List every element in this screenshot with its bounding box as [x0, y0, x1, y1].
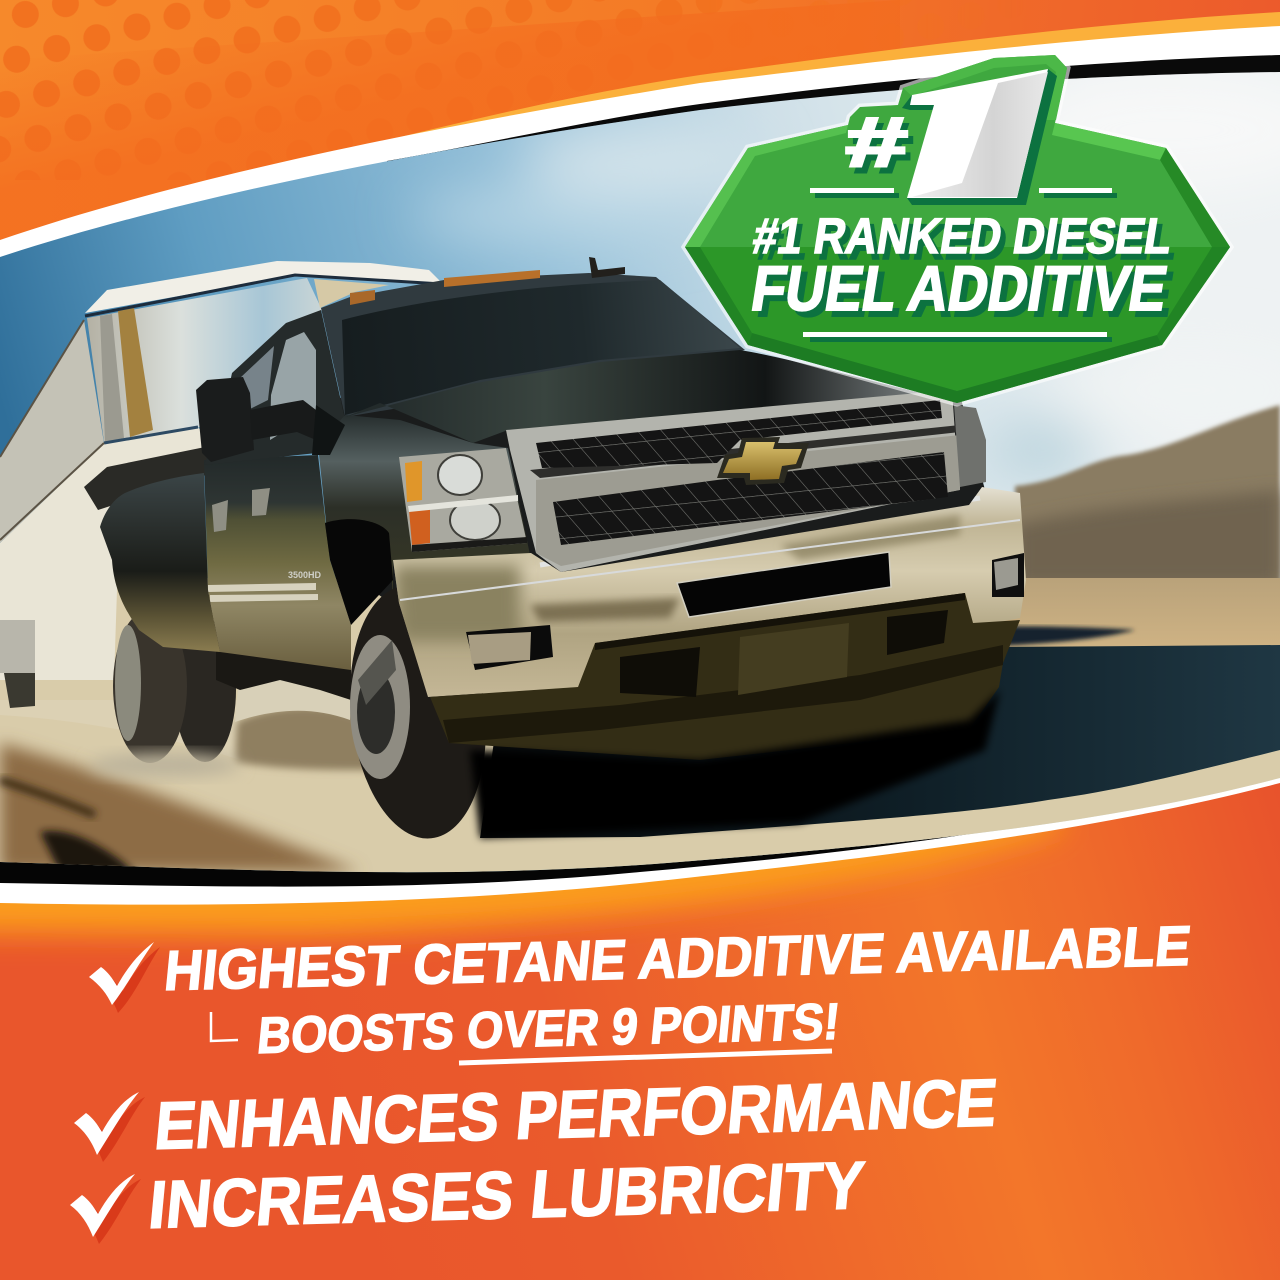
left fog light	[466, 625, 553, 670]
badge shape	[685, 55, 1230, 403]
grille surround	[506, 390, 960, 572]
hash sign: #	[849, 109, 911, 187]
badge text: line 2: FUEL ADDITIVE	[747, 254, 1172, 324]
chrome bumper	[393, 487, 1026, 697]
yellow accent line	[396, 12, 1280, 150]
benefit 3 check icon	[70, 1174, 141, 1244]
right fog light	[992, 553, 1024, 597]
divider lines	[810, 188, 1117, 198]
bottom rule	[803, 332, 1112, 342]
roof	[321, 273, 745, 417]
benefit 1 check icon	[89, 942, 160, 1013]
lower valance	[430, 593, 1020, 760]
badge text: line 2: FUEL ADDITIVE	[753, 260, 1178, 330]
front wheel	[350, 589, 486, 838]
bottom white and black swoosh	[0, 760, 1280, 905]
rear dual wheels	[90, 609, 240, 777]
underline	[459, 1051, 832, 1063]
clouds	[410, 70, 1280, 476]
side mirror	[196, 377, 345, 462]
right headlight	[954, 405, 986, 487]
truck side doors	[204, 455, 351, 670]
white and black top swoosh	[0, 26, 1280, 290]
upper grille mesh	[536, 400, 942, 468]
cab upper side with windows	[220, 310, 344, 460]
windshield	[342, 280, 740, 415]
shadow beneath truck	[470, 690, 1000, 838]
benefit 2 check icon	[74, 1092, 145, 1162]
benefit 3 text: INCREASES LUBRICITY	[146, 1148, 867, 1243]
lower grille mesh	[553, 452, 948, 545]
big number 1	[902, 69, 1057, 205]
badge text: line 1: #1 RANKED DIESEL	[749, 207, 1176, 264]
trailer	[0, 261, 442, 708]
rear fender	[100, 473, 220, 652]
hash sign: #	[844, 103, 906, 181]
clearance lights and antenna	[350, 257, 625, 305]
hash sign	[844, 103, 911, 187]
distant rocks	[1015, 405, 1280, 585]
hood	[345, 350, 945, 443]
badge: #1 ranked diesel fuel additive	[685, 55, 1230, 403]
ground	[0, 578, 1280, 888]
badge text: line 1: #1 RANKED DIESEL	[754, 213, 1181, 270]
benefit 2 text: ENHANCES PERFORMANCE	[152, 1066, 1000, 1164]
underbody	[216, 650, 351, 700]
bottom orange panel	[0, 770, 1280, 1280]
top orange banner	[0, 0, 1280, 240]
headlight	[399, 448, 527, 552]
dark truck base	[340, 398, 984, 597]
benefit 1 text: HIGHEST CETANE ADDITIVE AVAILABLE	[162, 914, 1194, 1002]
Chevrolet bowtie	[717, 437, 809, 485]
truck side doors: 3500HD	[288, 570, 322, 580]
front fender	[318, 415, 530, 600]
bumper air slot	[677, 552, 891, 617]
wheel arch	[325, 519, 393, 625]
sub-benefit text: BOOSTS OVER 9 POINTS!	[255, 993, 842, 1064]
photo: truck towing trailer on a dusty road	[0, 50, 1280, 888]
sub-bullet elbow	[211, 1012, 238, 1041]
